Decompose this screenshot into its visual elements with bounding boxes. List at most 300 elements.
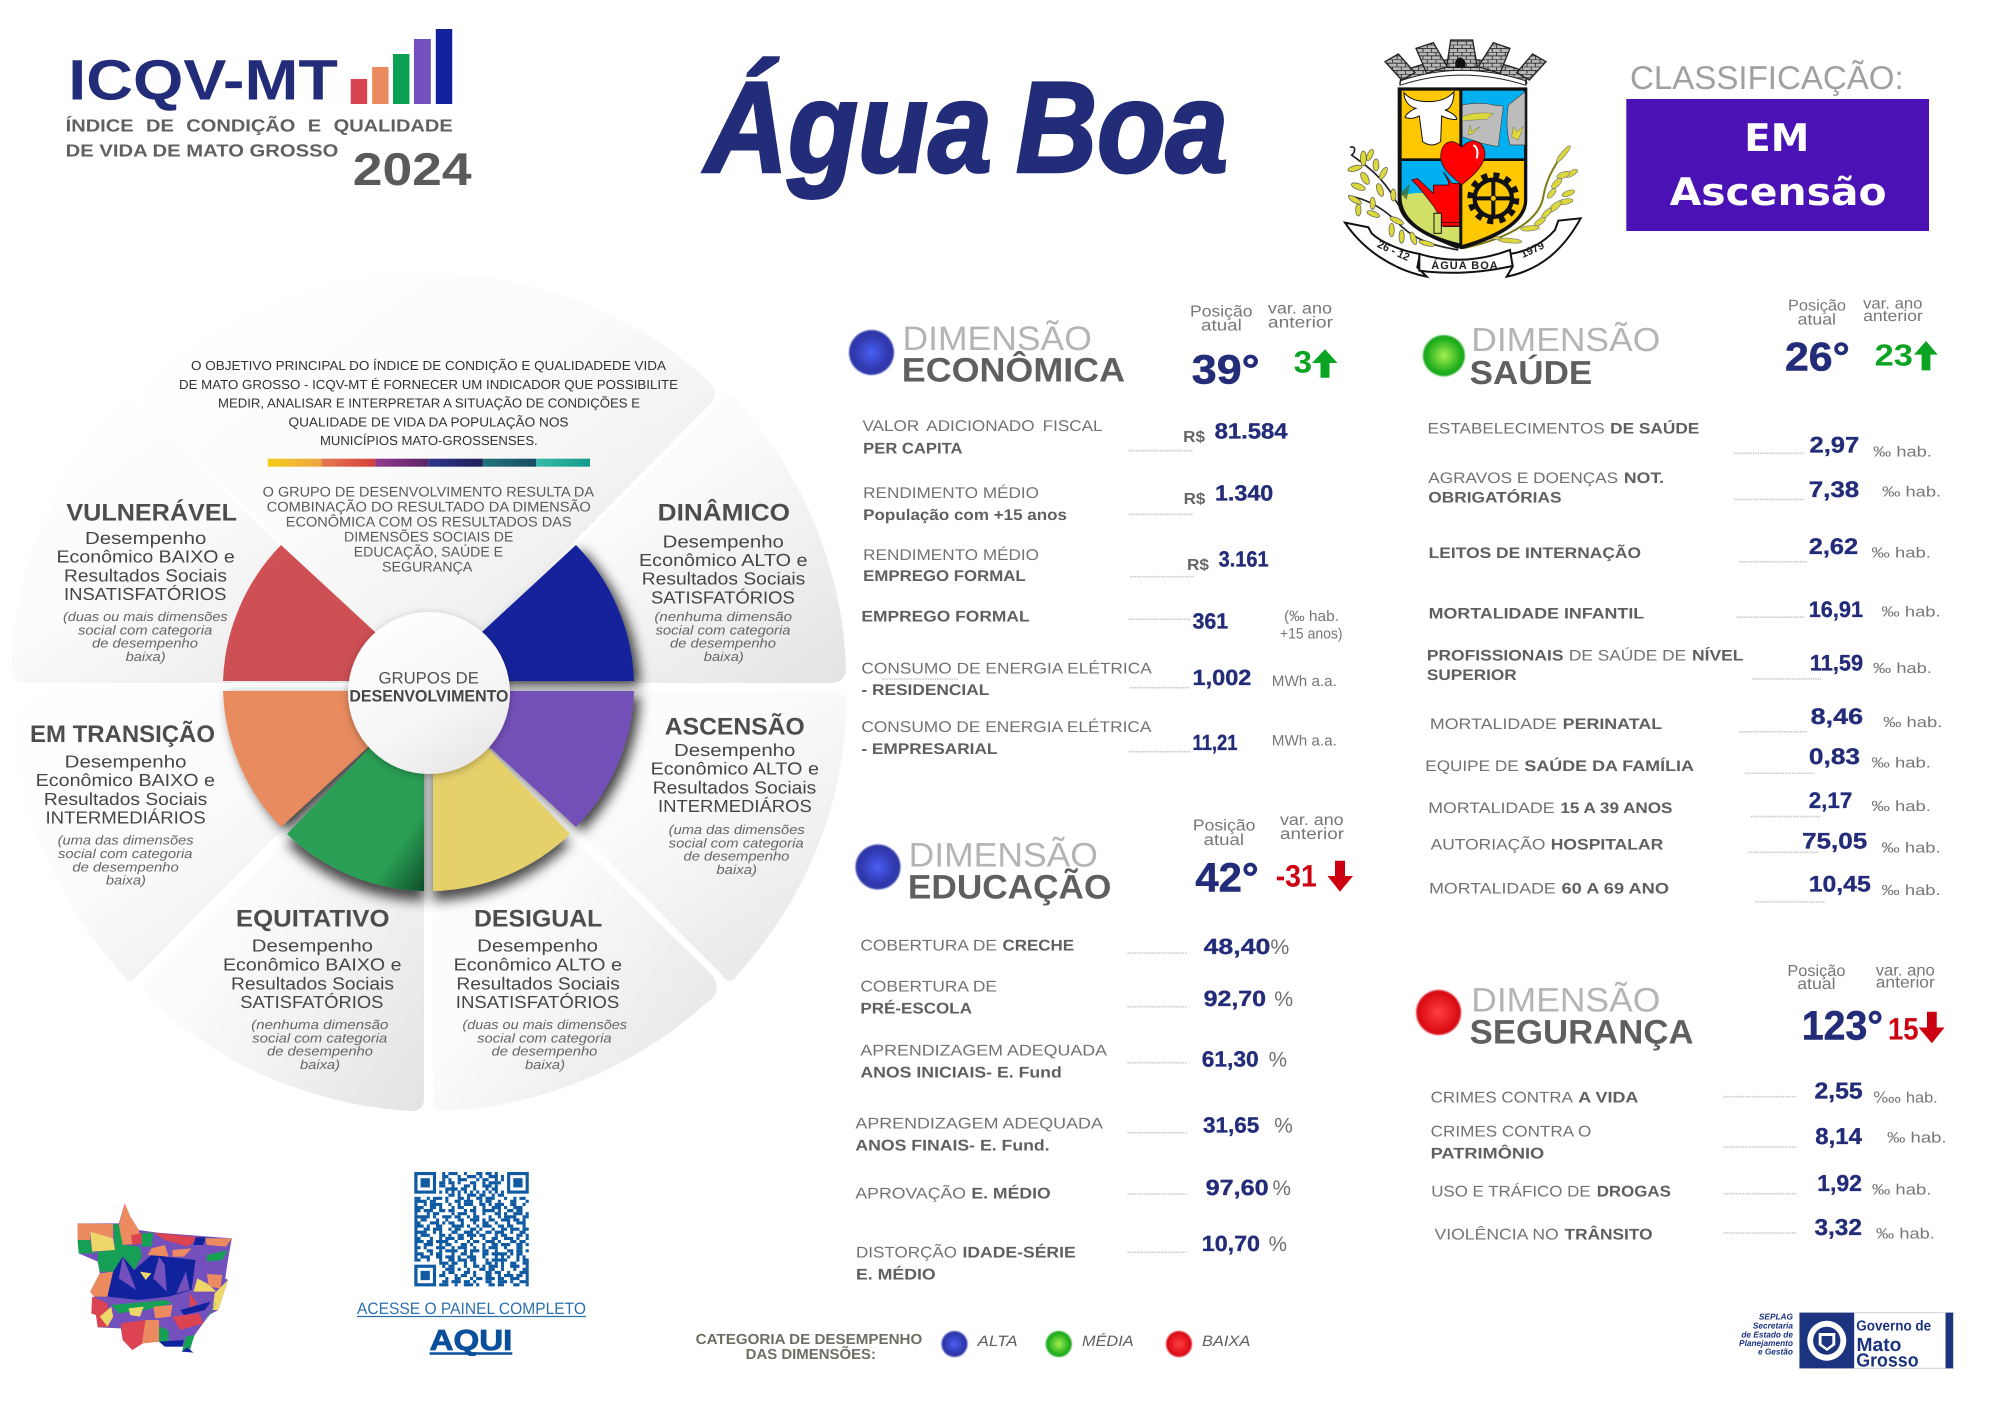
ring segment: equitativo green [287, 691, 424, 891]
ring segment: em transição orange [223, 691, 429, 827]
rank columns: Posição [1787, 963, 1846, 980]
rank columns: var. ano [1876, 962, 1935, 979]
indicator: pré-escola: % [1274, 988, 1293, 1011]
indicator: profissionais de saúde: PROFISSIONAIS [1427, 648, 1563, 664]
rank columns: -31 [1276, 859, 1317, 894]
indicator: mortalidade 15 a 39: ‰ hab. [1871, 798, 1931, 815]
indicator: profissionais de saúde: DE SAÚDE DE [1569, 647, 1686, 664]
indicator: energia empresarial: CONSUMO DE ENERGIA ELÉTRICA [861, 718, 1152, 736]
center circle: DESENVOLVIMENTO [349, 688, 509, 706]
sector: ascensão: Desempenho [674, 740, 795, 760]
objective text: QUALIDADE DE VIDA DA POPULAÇÃO NOS [288, 415, 569, 430]
QR code [414, 1172, 529, 1286]
group explanation text: SEGURANÇA [382, 559, 473, 575]
rank columns: 3 [1294, 344, 1312, 379]
sector: em transição: Econômico BAIXO e [36, 770, 215, 790]
rank columns: anterior [1268, 315, 1334, 332]
legend item: média [1046, 1331, 1134, 1357]
sector: vulnerável: Econômico BAIXO e [56, 547, 235, 567]
indicator: anos iniciais: 61,30 [1202, 1047, 1259, 1072]
indicator: anos finais: 31,65 [1203, 1113, 1259, 1138]
indicator: anos iniciais: ANOS INICIAIS- E. Fund [860, 1064, 1062, 1081]
sector: equitativo: baixa) [300, 1057, 340, 1072]
sector: vulnerável: Resultados Sociais [64, 565, 227, 585]
ring segment: vulnerável red [223, 545, 428, 681]
rank columns [1785, 296, 1938, 379]
indicator: mortalidade perinatal: PERINATAL [1563, 716, 1662, 733]
sector: dinâmico: SATISFATÓRIOS [651, 587, 795, 607]
indicator: rendimento emprego formal: RENDIMENTO MÉDIO [863, 546, 1039, 564]
SEPLAG text: Secretaria [1753, 1321, 1793, 1331]
indicator: aprovação: APROVAÇÃO [855, 1184, 966, 1202]
rank columns: var. ano [1280, 812, 1344, 829]
objective text: MUNICÍPIOS MATO-GROSSENSES. [320, 433, 538, 448]
indicator: profissionais de saúde: 11,59 [1810, 650, 1863, 675]
indicator: pré-escola: PRÉ-ESCOLA [860, 999, 972, 1017]
indicator: saúde da família: EQUIPE DE [1425, 758, 1519, 775]
heading: DIMENSÃO [1471, 982, 1660, 1020]
sector: vulnerável: INSATISFATÓRIOS [64, 584, 226, 604]
heading: EDUCAÇÃO [908, 867, 1111, 906]
heading: DIMENSÃO [902, 320, 1092, 358]
panel: dimensão saúde [1423, 296, 1942, 902]
indicator: rendimento médio [863, 481, 1273, 524]
heading: ECONÔMICA [902, 351, 1125, 390]
legend item: baixa [1166, 1331, 1250, 1357]
legend item: alta: ALTA [976, 1333, 1018, 1350]
rank columns: Posição [1193, 818, 1256, 835]
title: municipality name: Boa [1016, 56, 1228, 200]
heading: DIMENSÃO [909, 837, 1098, 875]
sector: desigual: DESIGUAL [474, 906, 602, 933]
indicator: profissionais de saúde: ‰ hab. [1873, 660, 1932, 677]
indicator: rendimento médio: População com +15 anos [863, 507, 1067, 524]
indicator: emprego formal: 361 [1192, 609, 1228, 634]
indicator: mortalidade 60 a 69: 10,45 [1809, 871, 1871, 896]
indicator: aprovação [855, 1175, 1291, 1202]
icon: green performance ball [1423, 335, 1465, 376]
group explanation text: ECONÔMICA COM OS RESULTADOS DAS [286, 514, 572, 530]
sector: em transição: (uma das dimensões [58, 833, 194, 848]
group explanation text: COMBINAÇÃO DO RESULTADO DA DIMENSÃO [267, 499, 591, 515]
SEPLAG text: de Estado de [1741, 1330, 1793, 1340]
heading [1470, 982, 1694, 1051]
indicator: uso e tráfico de drogas: DROGAS [1597, 1183, 1671, 1200]
logo wordmark: ICQV-MT [68, 48, 338, 112]
rank columns: atual [1201, 318, 1242, 335]
sector: dinâmico: DINÂMICO [658, 499, 790, 527]
indicator: rendimento emprego formal: R$ [1187, 557, 1209, 574]
indicator: valor adicionado fiscal: 81.584 [1215, 418, 1288, 443]
rank columns: anterior [1876, 975, 1936, 992]
indicator: pré-escola [860, 978, 1293, 1017]
indicator: mortalidade 15 a 39: MORTALIDADE [1428, 800, 1555, 817]
indicator: violência no trânsito [1434, 1214, 1935, 1243]
sector: equitativo: SATISFATÓRIOS [240, 992, 383, 1012]
sector: desigual: (duas ou mais dimensões [462, 1017, 628, 1032]
sector: ascensão: Resultados Sociais [653, 777, 816, 797]
icon: coat of arms of Água Boa: 1979 [1519, 240, 1546, 261]
indicator: autorização hospitalar [1431, 828, 1941, 856]
indicator: pré-escola: 92,70 [1204, 986, 1266, 1011]
sector: ascensão: INTERMEDIÁROS [658, 796, 812, 816]
indicator: agravos e doenças: OBRIGATÓRIAS [1428, 489, 1562, 506]
indicator: distorção idade-série: % [1269, 1233, 1287, 1256]
sector: dinâmico [440, 396, 846, 683]
indicator: rendimento médio: R$ [1184, 491, 1206, 508]
indicator: mortalidade infantil: ‰ hab. [1881, 604, 1941, 620]
indicator: distorção idade-série: E. MÉDIO [856, 1265, 936, 1283]
indicator: anos finais: APRENDIZAGEM ADEQUADA [855, 1116, 1104, 1133]
indicator: crimes contra o patrimônio: PATRIMÔNIO [1431, 1144, 1544, 1162]
indicator: anos iniciais: % [1269, 1049, 1287, 1072]
indicator: mortalidade 15 a 39 [1428, 788, 1931, 817]
logo subtitle [66, 116, 453, 161]
legend: categoria de desempenho [696, 1331, 1250, 1363]
sector: desigual: Desempenho [477, 936, 598, 956]
map: Mato Grosso municipalities [78, 1203, 232, 1353]
indicator: energia residencial: - RESIDENCIAL [861, 682, 989, 699]
title: municipality name: Água [702, 56, 992, 200]
indicator: profissionais de saúde: SUPERIOR [1427, 667, 1517, 684]
sector: em transição: Resultados Sociais [44, 789, 208, 809]
logo subtitle: DE VIDA DE MATO GROSSO [66, 141, 338, 161]
rainbow divider bar [268, 459, 590, 467]
indicator: mortalidade perinatal: ‰ hab. [1883, 714, 1942, 731]
indicator: aprovação: E. MÉDIO [971, 1184, 1051, 1202]
sector: vulnerável: de desempenho [92, 636, 198, 651]
SEPLAG text: SEPLAG [1759, 1312, 1793, 1322]
rank columns: atual [1797, 976, 1836, 993]
indicator: mortalidade infantil [1429, 597, 1941, 622]
sector: equitativo: Desempenho [252, 936, 373, 956]
sector: em transição: de desempenho [72, 859, 179, 874]
indicator: mortalidade perinatal: 8,46 [1811, 703, 1863, 729]
sector: ascensão: de desempenho [684, 849, 789, 864]
indicator: energia residencial: 1,002 [1192, 665, 1251, 690]
sector: desigual: INSATISFATÓRIOS [456, 992, 619, 1012]
icon: blue performance ball [856, 844, 900, 890]
SEPLAG text: Planejamento [1739, 1338, 1793, 1348]
indicator: uso e tráfico de drogas [1431, 1170, 1931, 1200]
year: 2024 [353, 143, 472, 195]
rank columns: 15 [1888, 1011, 1919, 1046]
indicator: agravos e doenças [1428, 470, 1941, 506]
rank columns [1190, 300, 1338, 392]
rank columns [1787, 962, 1945, 1048]
indicator: autorização hospitalar: HOSPITALAR [1551, 837, 1663, 853]
indicator: emprego formal: (‰ hab. [1284, 608, 1339, 625]
legend item: baixa: BAIXA [1202, 1333, 1250, 1350]
indicator: saúde da família [1425, 744, 1931, 775]
indicator: distorção idade-série: 10,70 [1202, 1231, 1260, 1256]
indicator: rendimento médio: 1.340 [1215, 481, 1273, 506]
indicator: profissionais de saúde: NÍVEL [1692, 647, 1744, 664]
indicator: creche: CRECHE [1002, 938, 1074, 955]
objective text [179, 358, 678, 448]
indicator: mortalidade 60 a 69 [1429, 871, 1941, 902]
rank columns [1193, 812, 1353, 901]
sector: vulnerável: baixa) [126, 649, 166, 664]
indicator: anos iniciais: APRENDIZAGEM ADEQUADA [860, 1043, 1108, 1060]
sector: desigual: social com categoria [477, 1030, 612, 1045]
indicator: energia residencial: MWh a.a. [1272, 673, 1337, 690]
indicator: profissionais de saúde [1427, 647, 1932, 684]
rank columns: 123° [1802, 1002, 1883, 1048]
indicator: energia empresarial: MWh a.a. [1272, 732, 1337, 749]
government badge: Grosso [1856, 1351, 1919, 1372]
sector: dinâmico: Resultados Sociais [642, 569, 806, 589]
chart: development groups wheel [11, 273, 847, 1111]
indicator: agravos e doenças: AGRAVOS E DOENÇAS [1428, 470, 1618, 487]
sector: em transição: Desempenho [65, 751, 186, 771]
link: acesse o painel completo: ACESSE O PAINEL COMPLETO [357, 1300, 586, 1318]
sector: equitativo [145, 700, 424, 1111]
ring segment: ascensão purple [429, 691, 634, 827]
ring segment: dinâmico blue [429, 545, 634, 681]
sector: vulnerável: social com categoria [78, 622, 212, 637]
indicator: energia residencial: CONSUMO DE ENERGIA ELÉTRICA [861, 659, 1153, 677]
logo subtitle: ÍNDICE DE CONDIÇÃO E QUALIDADE [66, 116, 453, 136]
indicator: mortalidade 60 a 69: MORTALIDADE [1429, 881, 1556, 897]
sector: em transição: EM TRANSIÇÃO [30, 720, 215, 748]
indicator: crimes contra o patrimônio: ‰ hab. [1887, 1130, 1947, 1147]
title: municipality name [702, 56, 1228, 200]
indicator: estabelecimentos de saúde [1428, 420, 1932, 460]
logo bar icon [351, 29, 452, 104]
sector: vulnerável: Desempenho [85, 528, 206, 548]
panel: classification badge: EM [1744, 116, 1809, 160]
objective text: O OBJETIVO PRINCIPAL DO ÍNDICE DE CONDIÇÃO E QUALIDADEDE VIDA [191, 358, 666, 373]
indicator: uso e tráfico de drogas: 1,92 [1817, 1170, 1862, 1196]
group explanation text: DIMENSÕES SOCIAIS DE [344, 529, 513, 545]
indicator: anos iniciais [860, 1043, 1287, 1081]
indicator: energia empresarial [861, 718, 1337, 758]
center circle: GRUPOS DE [378, 669, 479, 687]
indicator: anos finais [855, 1113, 1293, 1154]
sector: desigual: Resultados Sociais [456, 973, 620, 993]
indicator: estabelecimentos de saúde: ‰ hab. [1873, 444, 1932, 460]
heading: DIMENSÃO [1471, 322, 1660, 359]
indicator: anos finais: ANOS FINAIS- E. Fund. [855, 1137, 1050, 1154]
icon: coat of arms of Água Boa: ÁGUA BOA [1431, 259, 1499, 272]
indicator: mortalidade 15 a 39: 2,17 [1809, 788, 1852, 813]
heading: SEGURANÇA [1470, 1013, 1694, 1051]
indicator: crimes contra o patrimônio: CRIMES CONTRA O [1431, 1123, 1591, 1140]
indicator: emprego formal: EMPREGO FORMAL [861, 609, 1030, 626]
indicator: rendimento emprego formal: EMPREGO FORMAL [863, 568, 1026, 585]
objective text: MEDIR, ANALISAR E INTERPRETAR A SITUAÇÃO DE CONDIÇÕES E [218, 396, 640, 411]
indicator: autorização hospitalar: AUTORIAÇÃO [1431, 836, 1545, 853]
indicator: estabelecimentos de saúde: DE SAÚDE [1610, 420, 1699, 438]
sector: equitativo: (nenhuma dimensão [251, 1017, 388, 1032]
indicator: mortalidade perinatal [1430, 703, 1942, 733]
indicator: crimes contra o patrimônio: 8,14 [1815, 1123, 1862, 1149]
indicator: emprego formal: +15 anos) [1280, 626, 1342, 643]
indicator: uso e tráfico de drogas: ‰ hab. [1872, 1182, 1931, 1199]
heading: classificação: CLASSIFICAÇÃO: [1630, 59, 1904, 96]
sector: ascensão [440, 691, 847, 981]
sector: vulnerável [11, 396, 416, 683]
indicator: crimes contra a vida: A VIDA [1578, 1089, 1638, 1106]
rank columns: anterior [1280, 826, 1345, 843]
indicator: agravos e doenças: 7,38 [1809, 476, 1859, 502]
indicator: autorização hospitalar: ‰ hab. [1881, 840, 1941, 856]
indicator: anos finais: % [1274, 1115, 1293, 1138]
sector: equitativo: de desempenho [267, 1044, 373, 1059]
government badge [1800, 1313, 1954, 1372]
group explanation text: O GRUPO DE DESENVOLVIMENTO RESULTA DA [263, 484, 595, 500]
panel: dimensão segurança [1416, 962, 1947, 1243]
ring segment: desigual yellow [433, 691, 570, 891]
indicator: pré-escola: COBERTURA DE [860, 978, 997, 995]
indicator: valor adicionado fiscal [862, 418, 1288, 457]
indicator: saúde da família: 0,83 [1809, 744, 1860, 769]
icon: coat of arms of Água Boa: 26 - 12 [1375, 239, 1411, 264]
sector: ascensão: social com categoria [669, 835, 804, 850]
heading [902, 320, 1125, 390]
indicator: mortalidade infantil: 16,91 [1809, 597, 1863, 622]
indicator: rendimento médio: RENDIMENTO MÉDIO [863, 484, 1039, 502]
indicator: crimes contra a vida: ‱ hab. [1873, 1089, 1938, 1106]
panel: dimensão educação [855, 812, 1353, 1283]
indicator: emprego formal [861, 608, 1342, 643]
indicator: distorção idade-série: IDADE-SÉRIE [962, 1243, 1076, 1261]
rank columns: var. ano [1268, 300, 1332, 317]
rank columns: atual [1204, 832, 1244, 849]
rank columns: atual [1798, 312, 1836, 328]
indicator: leitos de internação: LEITOS DE INTERNAÇÃO [1429, 545, 1641, 562]
sector: em transição: social com categoria [58, 846, 192, 861]
indicator: agravos e doenças: NOT. [1624, 470, 1664, 487]
icon: coat of arms of Água Boa [1345, 40, 1581, 277]
sector: dinâmico: de desempenho [670, 636, 776, 651]
sector: vulnerável: VULNERÁVEL [66, 499, 237, 527]
sector: em transição [11, 691, 420, 981]
indicator: crimes contra a vida: CRIMES CONTRA [1431, 1089, 1574, 1106]
sector: equitativo: EQUITATIVO [236, 906, 390, 933]
rank columns: 26° [1785, 334, 1850, 379]
indicator: saúde da família: ‰ hab. [1871, 755, 1931, 771]
government badge: Mato [1857, 1335, 1901, 1356]
indicator: aprovação: % [1272, 1177, 1291, 1200]
center circle [348, 612, 510, 774]
rank columns: 42° [1195, 855, 1259, 901]
heading [1470, 322, 1660, 392]
link: aqui: AQUI [430, 1325, 512, 1357]
indicator: aprovação: 97,60 [1206, 1175, 1269, 1200]
rank columns: anterior [1863, 308, 1924, 325]
rank columns: var. ano [1863, 296, 1922, 312]
rank columns: 23 [1875, 338, 1913, 372]
indicator: mortalidade 60 a 69: 60 A 69 ANO [1562, 881, 1669, 897]
sector: desigual: de desempenho [492, 1044, 597, 1059]
indicator: creche: % [1270, 936, 1289, 959]
indicator: mortalidade infantil: MORTALIDADE INFANTIL [1429, 606, 1644, 622]
heading: SAÚDE [1470, 353, 1592, 392]
indicator: energia empresarial: 11,21 [1192, 730, 1238, 755]
sector: dinâmico: social com categoria [656, 622, 790, 637]
sector: em transição: INTERMEDIÁRIOS [46, 808, 206, 828]
indicator: leitos de internação: 2,62 [1809, 534, 1858, 559]
panel: classification badge: Ascensão [1670, 170, 1887, 214]
indicator: violência no trânsito: TRÂNSITO [1565, 1225, 1653, 1243]
indicator: mortalidade 60 a 69: ‰ hab. [1881, 882, 1941, 899]
sector: objective (top) [141, 273, 715, 690]
sector: desigual: Econômico ALTO e [454, 954, 622, 974]
indicator: estabelecimentos de saúde: ESTABELECIMENTOS [1428, 421, 1605, 438]
panel: classification badge [1626, 99, 1929, 231]
indicator: agravos e doenças: ‰ hab. [1882, 484, 1941, 500]
SEPLAG text [1739, 1312, 1793, 1357]
sector: em transição: baixa) [106, 873, 146, 888]
sector: dinâmico: Desempenho [663, 531, 784, 551]
indicator: leitos de internação: ‰ hab. [1871, 545, 1931, 561]
sector: ascensão: (uma das dimensões [669, 822, 805, 837]
indicator: mortalidade perinatal: MORTALIDADE [1430, 716, 1557, 733]
indicator: distorção idade-série: DISTORÇÃO [856, 1243, 957, 1261]
logo: SEPLAG and Governo de Mato Grosso [1739, 1312, 1954, 1372]
sector: dinâmico: Econômico ALTO e [639, 550, 808, 570]
sector: dinâmico: (nenhuma dimensão [654, 609, 792, 624]
sector: ascensão: ASCENSÃO [665, 712, 805, 740]
SEPLAG text: e Gestão [1758, 1347, 1793, 1357]
indicator: autorização hospitalar: 75,05 [1802, 828, 1867, 853]
indicator: rendimento emprego formal: 3.161 [1219, 547, 1269, 572]
sector: equitativo: Resultados Sociais [231, 973, 394, 993]
indicator: crimes contra a vida: 2,55 [1814, 1078, 1863, 1104]
objective text: DE MATO GROSSO - ICQV-MT É FORNECER UM INDICADOR QUE POSSIBILITE [179, 377, 678, 392]
indicator: creche [860, 934, 1289, 959]
indicator: leitos de internação [1429, 534, 1931, 562]
sector: desigual [433, 700, 717, 1111]
indicator: saúde da família: SAÚDE DA FAMÍLIA [1524, 757, 1694, 775]
legend item: média: MÉDIA [1082, 1332, 1134, 1350]
indicator: uso e tráfico de drogas: USO E TRÁFICO DE [1431, 1182, 1591, 1200]
indicator: energia residencial [861, 659, 1337, 699]
sector: ascensão: Econômico ALTO e [651, 758, 819, 778]
legend: categoria de desempenho: CATEGORIA DE DESEMPENHO [696, 1332, 922, 1348]
rank columns: Posição [1788, 298, 1846, 314]
legend item: alta [942, 1331, 1018, 1357]
group explanation text [263, 484, 595, 575]
sector: ascensão: baixa) [716, 862, 757, 877]
indicator: rendimento emprego formal [863, 546, 1269, 585]
heading [908, 837, 1111, 906]
sector: dinâmico: baixa) [704, 649, 744, 664]
indicator: crimes contra o patrimônio [1431, 1123, 1947, 1162]
indicator: crimes contra a vida [1431, 1078, 1938, 1106]
indicator: mortalidade 15 a 39: 15 A 39 ANOS [1560, 800, 1672, 817]
indicator: valor adicionado fiscal: VALOR ADICIONADO FISCAL [862, 418, 1103, 435]
group explanation text: EDUCAÇÃO, SAÚDE E [354, 544, 503, 560]
indicator: creche: COBERTURA DE [860, 938, 997, 955]
rank columns: Posição [1190, 304, 1253, 321]
sector: vulnerável: (duas ou mais dimensões [63, 609, 228, 624]
indicator: violência no trânsito: 3,32 [1814, 1214, 1862, 1240]
indicator: violência no trânsito: ‰ hab. [1876, 1225, 1935, 1242]
indicator: violência no trânsito: VIOLÊNCIA NO [1434, 1225, 1559, 1243]
sector: equitativo: social com categoria [252, 1030, 387, 1045]
indicator: energia empresarial: - EMPRESARIAL [861, 741, 998, 758]
rank columns: 39° [1192, 346, 1260, 392]
indicator: creche: 48,40 [1204, 934, 1270, 959]
government badge: Governo de [1856, 1318, 1931, 1334]
icon: blue performance ball [849, 330, 894, 375]
indicator: valor adicionado fiscal: PER CAPITA [863, 440, 962, 457]
legend: categoria de desempenho: DAS DIMENSÕES: [746, 1346, 876, 1363]
indicator: valor adicionado fiscal: R$ [1183, 429, 1205, 446]
